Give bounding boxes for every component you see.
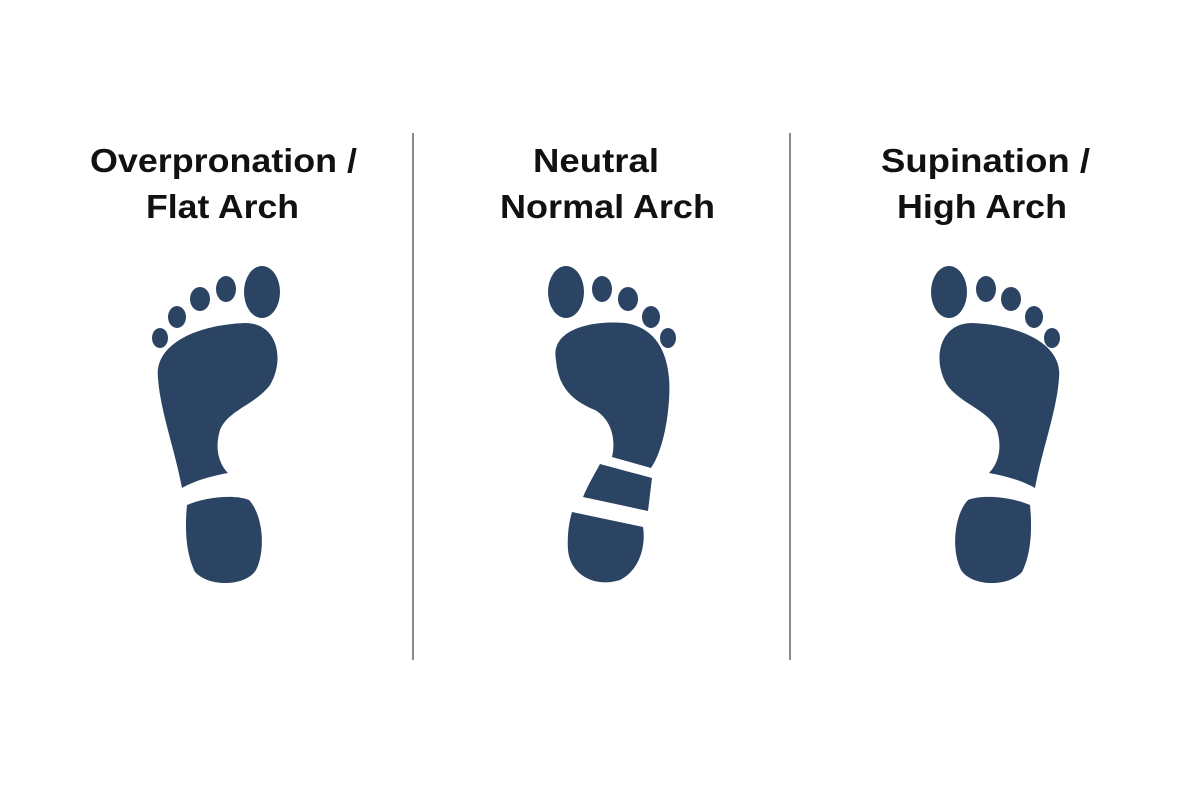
panel: overpronation bbox=[90, 142, 357, 583]
title: supination: High Arch bbox=[897, 188, 1067, 225]
title: supination: Supination / bbox=[881, 142, 1090, 179]
title: overpronation: Overpronation / bbox=[90, 142, 357, 179]
title: neutral bbox=[500, 142, 715, 225]
panel: neutral bbox=[500, 142, 715, 582]
icon: flat arch footprint bbox=[152, 266, 280, 583]
title: overpronation: Flat Arch bbox=[146, 188, 299, 225]
title: neutral: Neutral bbox=[533, 142, 659, 179]
icon: normal arch footprint bbox=[548, 266, 676, 582]
panel: supination bbox=[881, 142, 1090, 583]
title: supination bbox=[881, 142, 1090, 225]
title: overpronation bbox=[90, 142, 357, 225]
title: neutral: Normal Arch bbox=[500, 188, 715, 225]
icon: high arch footprint bbox=[931, 266, 1060, 583]
